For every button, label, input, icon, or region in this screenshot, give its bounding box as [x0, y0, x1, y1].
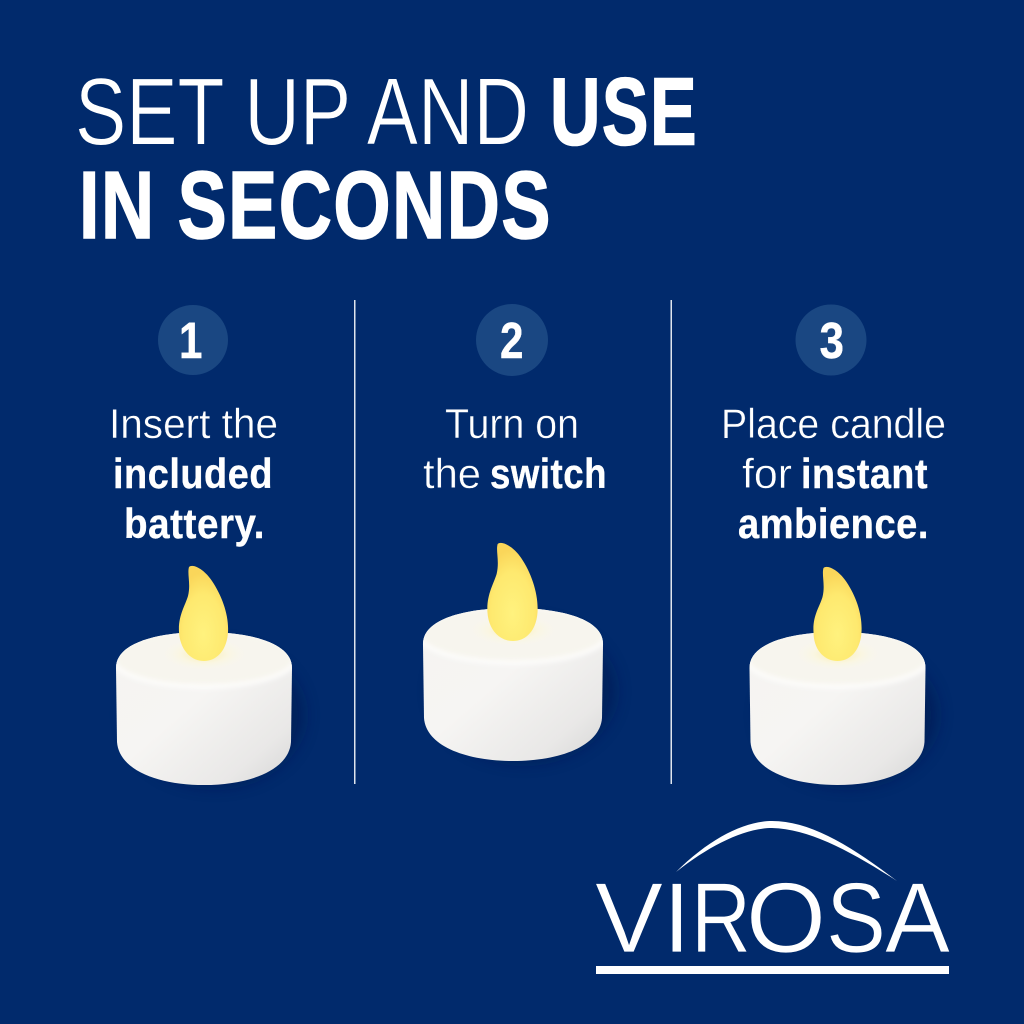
step 3 text: Place candle: [721, 400, 946, 447]
divider right: [670, 300, 672, 784]
step 1 number badge: 1: [179, 312, 203, 369]
title: SET UP AND: [75, 58, 529, 166]
step 2 text: Turn on: [445, 400, 579, 447]
logo wordmark: I: [663, 862, 691, 973]
step 1 text: battery.: [124, 500, 265, 547]
step 3 text: ambience.: [738, 500, 929, 547]
step 2 number badge: 2: [500, 312, 524, 369]
logo wordmark: [595, 862, 950, 973]
step 3 text: for: [742, 450, 792, 497]
step 3 number badge: 3: [820, 312, 844, 369]
panel: step 3: [721, 304, 946, 785]
step 1 text: [109, 400, 278, 547]
logo wordmark: S: [826, 862, 886, 973]
step 2 number badge: [476, 304, 548, 376]
logo: Virosa: [595, 821, 950, 974]
panel: step 1: [109, 305, 303, 785]
logo wordmark: V: [595, 862, 663, 973]
title: [75, 58, 698, 259]
step 2 text: switch: [490, 450, 607, 497]
step 3 candle: [746, 567, 936, 785]
step 2 text: [423, 400, 607, 497]
step 3 number badge: [796, 304, 866, 376]
logo underline: [596, 966, 949, 974]
step 3 text: instant: [801, 450, 928, 497]
title: IN SECONDS: [79, 152, 552, 259]
step 1 number badge: [158, 305, 228, 375]
logo wordmark: A: [885, 862, 950, 973]
step 1 candle: [112, 566, 303, 785]
logo wordmark: O: [746, 862, 826, 973]
logo wordmark: R: [691, 862, 751, 973]
step 3 text: [721, 400, 946, 547]
logo arc: [676, 821, 897, 881]
title: USE: [550, 58, 698, 166]
step 2 text: the: [423, 450, 481, 497]
step 2 candle: [419, 543, 614, 761]
step 1 text: included: [113, 450, 273, 497]
panel: step 2: [419, 304, 614, 761]
divider left: [354, 300, 356, 784]
step 1 text: Insert the: [109, 400, 278, 447]
